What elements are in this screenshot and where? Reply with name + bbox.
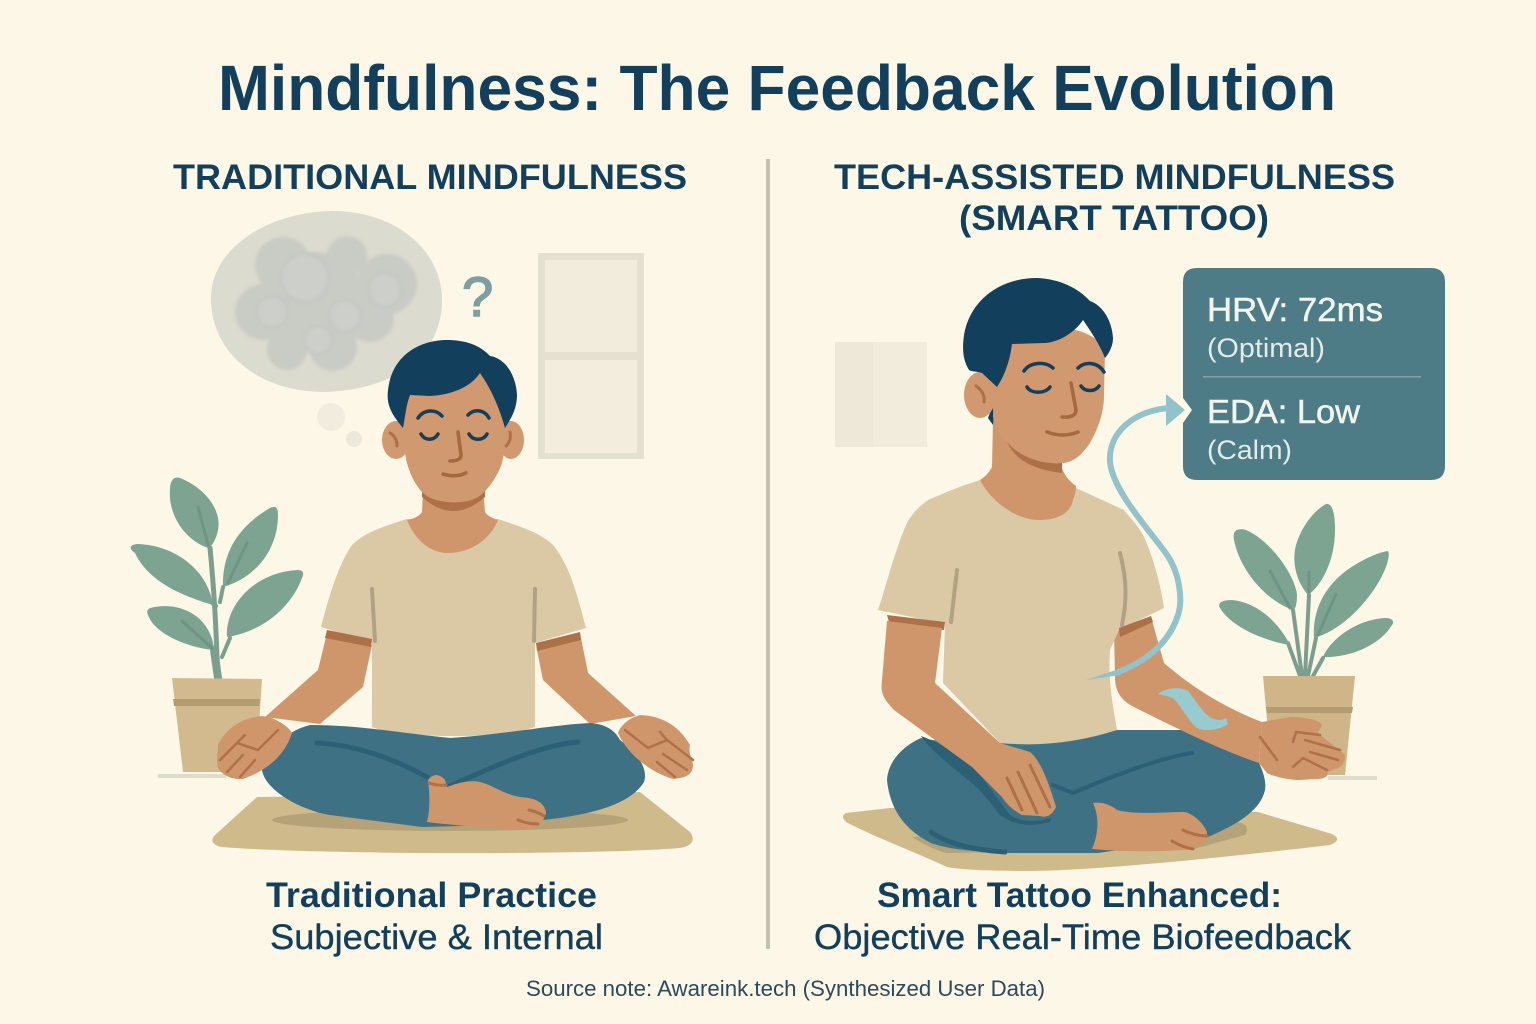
neck [407,488,498,553]
face [418,411,489,439]
data card: EDA: Low [1207,393,1360,430]
neck [980,420,1076,520]
heading: tech-assisted mindfulness [834,158,1395,238]
caption: smart tattoo enhanced [814,876,1352,957]
window [538,253,644,459]
arms [265,633,372,724]
panel: traditional illustration [131,211,693,853]
hands [217,716,292,779]
caption: traditional practice: Subjective & Internal [270,918,603,957]
arrow: tattoo to data [1086,394,1185,680]
caption: smart tattoo enhanced: Objective Real-Time Biofeedback [814,918,1352,957]
hair [963,278,1113,387]
right arm [1114,617,1262,763]
data card [1183,268,1445,480]
heading: traditional mindfulness: TRADITIONAL MINDFULNESS [173,158,687,197]
heading: tech-assisted mindfulness: (SMART TATTOO) [959,199,1269,238]
data card: (Calm) [1207,435,1292,465]
head [403,370,505,502]
data card: (Optimal) [1207,333,1325,363]
ears [382,421,410,459]
question mark: ? [462,265,493,328]
hair [388,340,517,428]
hand [1259,717,1345,780]
left arm [882,621,1056,817]
mat [212,792,693,853]
title: Mindfulness: The Feedback Evolution [218,52,1336,124]
foot [1092,803,1207,851]
torso [878,480,1164,744]
left person [217,340,693,830]
legs [262,723,645,827]
mat [843,808,1337,871]
right person [878,278,1345,853]
source note: Source note: Awareink.tech (Synthesized User Data) [526,976,1045,1001]
plant [131,478,303,778]
wall panel [835,342,927,447]
head [988,400,995,425]
caption: traditional practice: Traditional Practice [266,876,597,915]
caption: traditional practice [266,876,603,957]
panel: tech-assisted illustration [835,268,1445,871]
caption: smart tattoo enhanced: Smart Tattoo Enhanced: [877,876,1282,915]
tattoo [1158,688,1228,730]
data card: HRV: 72ms [1207,291,1383,328]
heading: tech-assisted mindfulness: TECH-ASSISTED MINDFULNESS [834,158,1395,197]
thought cloud [211,211,442,447]
plant [1219,504,1393,780]
legs [887,730,1265,853]
torso [321,519,586,736]
foot [427,775,546,830]
face [1024,363,1104,392]
